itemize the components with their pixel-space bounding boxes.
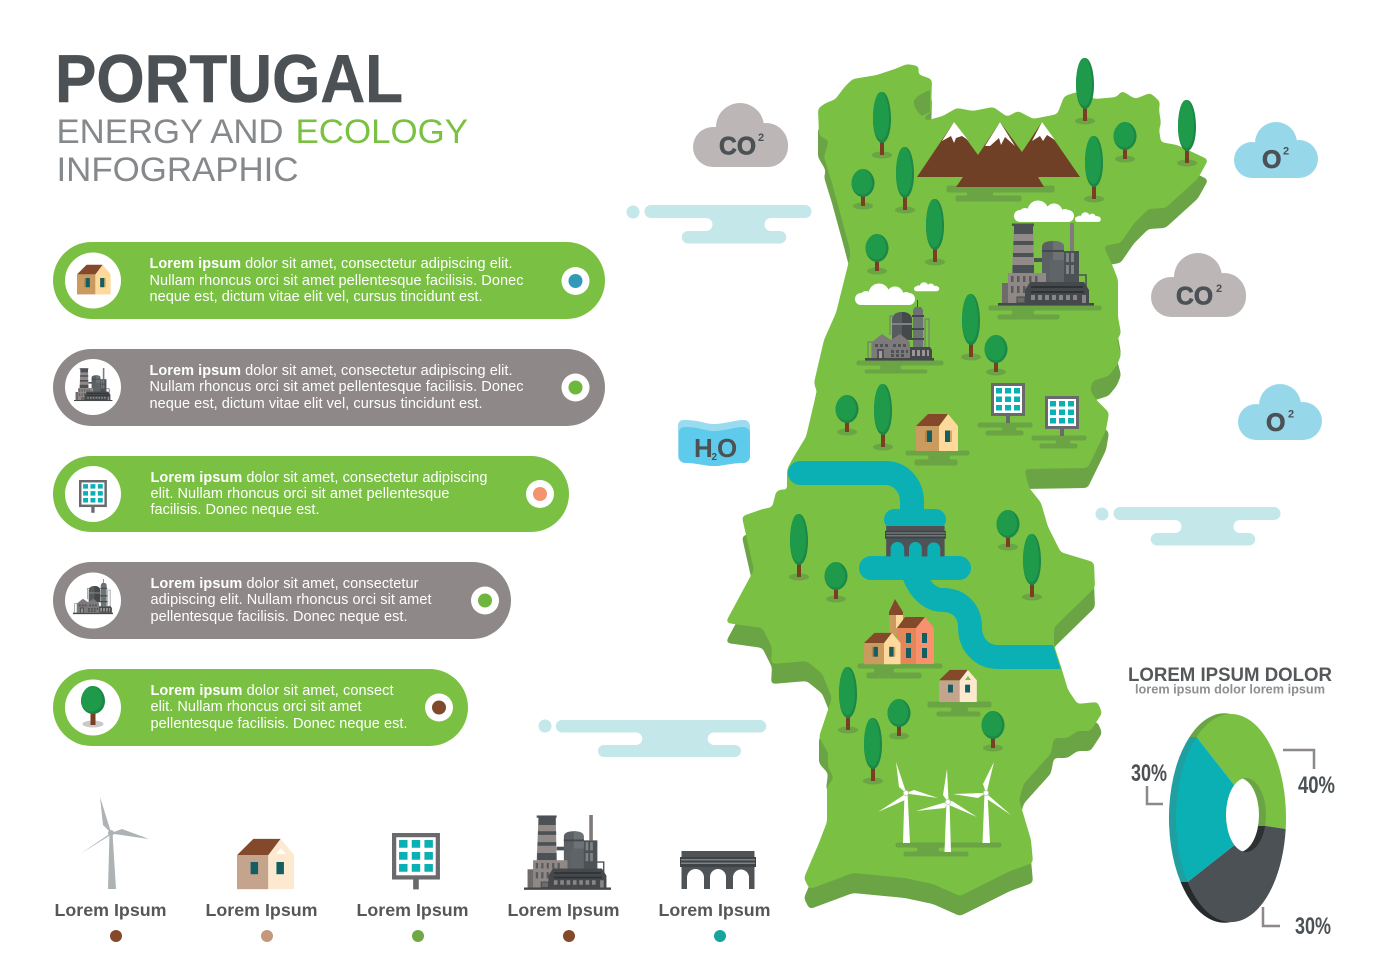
cloud: CO2 right	[1151, 253, 1246, 317]
mist: right	[1096, 507, 1280, 546]
text block 2: Nullam rhoncus orci sit amet pellentesque facilisis. Donec	[150, 379, 524, 395]
legend item: wind turbine: Lorem Ipsum	[54, 900, 166, 920]
marker dot	[425, 694, 453, 722]
house gable detail	[965, 676, 971, 680]
segment 30 percent teal	[1176, 737, 1246, 882]
map extrusion shadow	[727, 85, 1207, 915]
legend item: house: Lorem Ipsum	[206, 900, 318, 920]
tall trees	[789, 58, 1197, 784]
text block 3	[150, 470, 488, 518]
mountains	[917, 122, 1080, 187]
house	[916, 414, 958, 451]
icon: refinery	[73, 579, 113, 614]
map land surface	[727, 65, 1207, 895]
cloud: CO2 upper left	[693, 103, 788, 167]
legend item: factory: Lorem Ipsum	[508, 900, 620, 920]
legend item: solar panel	[356, 833, 468, 942]
subheading: ecology: ECOLOGY	[296, 113, 468, 151]
cloud: O2 upper right: O	[1262, 146, 1281, 174]
panel: item 3 solar	[53, 456, 569, 532]
dam bridge	[885, 526, 946, 556]
smoke clouds	[855, 200, 1101, 305]
panel: item 4 refinery	[53, 562, 511, 639]
cloud: CO2 upper left: 2	[758, 132, 764, 144]
round trees	[824, 122, 1137, 752]
callout: 40 percent	[1283, 750, 1335, 799]
text block 1: Lorem ipsum dolor sit amet, consectetur adipiscing elit.	[150, 256, 512, 272]
text block 4: Lorem ipsum dolor sit amet, consectetur	[150, 576, 419, 592]
icon: factory	[74, 368, 112, 401]
cloud: O2 lower right: 2	[1288, 408, 1294, 420]
panel: item 2 power plant	[53, 349, 605, 426]
legend	[54, 797, 770, 942]
text block 2: neque est, dictum vitae elit vel, cursus tincidunt est.	[150, 396, 482, 412]
marker dot	[562, 267, 590, 295]
marker dot	[526, 480, 554, 508]
callout: 30 percent left: 30%	[1131, 760, 1167, 787]
callout: 30 percent bottom	[1263, 907, 1331, 940]
legend item: bridge: Lorem Ipsum	[658, 900, 770, 920]
water badge: H2O: H	[694, 433, 713, 463]
cloud: CO2 right: 2	[1216, 283, 1222, 295]
subheading: infographic: INFOGRAPHIC	[56, 151, 298, 189]
callout: 30 percent bottom: 30%	[1295, 913, 1331, 940]
text block 2	[150, 363, 524, 412]
donut chart	[1169, 713, 1286, 923]
mist: upper left	[626, 205, 812, 244]
refinery	[865, 300, 934, 361]
text block 1: neque est, dictum vitae elit vel, cursus tincidunt est.	[150, 289, 482, 305]
marker dot	[562, 374, 590, 402]
cloud: O2 lower right	[1238, 384, 1322, 440]
water badge: H2O: O	[717, 433, 737, 463]
notch shade	[914, 90, 930, 116]
text block 3: Lorem ipsum dolor sit amet, consectetur adipiscing	[150, 470, 488, 486]
cloud: CO2 upper left: CO	[719, 132, 756, 160]
river	[800, 473, 1070, 657]
text block 3: elit. Nullam rhoncus orci sit amet pellentesque	[150, 486, 450, 502]
legend item: wind turbine	[54, 797, 166, 942]
extrusion green	[1190, 713, 1231, 737]
callout: 30 percent left	[1131, 760, 1167, 804]
cloud: O2 lower right: O	[1266, 409, 1285, 437]
callout: 40 percent: 40%	[1298, 772, 1335, 799]
text block 3: facilisis. Donec neque est.	[150, 502, 320, 518]
text block 1	[150, 256, 524, 305]
pale house	[939, 670, 977, 702]
solar panel 1	[991, 383, 1025, 423]
extrusion dark	[1181, 882, 1231, 923]
mist: lower left	[538, 720, 766, 757]
heading: Portugal: PORTUGAL	[55, 41, 403, 117]
segment 40 percent	[1196, 714, 1286, 829]
wind turbines	[878, 762, 1011, 852]
chart heading: lorem ipsum dolor lorem ipsum	[1135, 682, 1325, 696]
panel: item 1 house	[53, 242, 605, 319]
chart heading: LOREM IPSUM DOLOR	[1128, 664, 1332, 686]
segment 30 percent dark	[1188, 823, 1286, 922]
icon: house	[77, 265, 111, 294]
cloud: O2 upper right: 2	[1283, 146, 1289, 158]
donut hole	[1226, 778, 1266, 852]
text block 4: pellentesque facilisis. Donec neque est.	[150, 609, 408, 625]
text block 5	[150, 683, 408, 732]
power plant	[998, 223, 1094, 306]
cloud: CO2 right: CO	[1176, 282, 1213, 310]
map: Portugal	[727, 58, 1207, 915]
legend item: solar panel: Lorem Ipsum	[356, 900, 468, 920]
marker dot	[471, 586, 499, 614]
text block 4	[150, 576, 432, 625]
ground shadows	[857, 186, 1101, 856]
chart heading	[1128, 664, 1332, 696]
title	[55, 41, 468, 189]
text block 1: Nullam rhoncus orci sit amet pellentesque facilisis. Donec	[150, 273, 524, 289]
water badge: H2O	[678, 420, 750, 466]
icon: tree	[81, 686, 105, 728]
solar panel 2	[1045, 396, 1079, 436]
text block 5: elit. Nullam rhoncus orci sit amet	[150, 699, 362, 715]
panel: item 5 tree	[53, 669, 468, 746]
extrusion teal	[1169, 737, 1199, 882]
text block 2: Lorem ipsum dolor sit amet, consectetur adipiscing elit.	[150, 363, 512, 379]
legend item: factory	[508, 815, 620, 942]
town	[864, 599, 934, 664]
text block 4: adipiscing elit. Nullam rhoncus orci sit amet	[150, 592, 432, 608]
text block 5: pellentesque facilisis. Donec neque est.	[150, 716, 408, 732]
legend item: bridge	[658, 851, 770, 942]
cloud: O2 upper right	[1234, 122, 1318, 178]
subheading: energy and: ENERGY AND	[56, 113, 284, 151]
legend item: house	[206, 839, 318, 942]
text block 5: Lorem ipsum dolor sit amet, consect	[150, 683, 394, 699]
icon: solar panel	[79, 480, 107, 513]
water badge: H2O: 2	[712, 452, 718, 463]
